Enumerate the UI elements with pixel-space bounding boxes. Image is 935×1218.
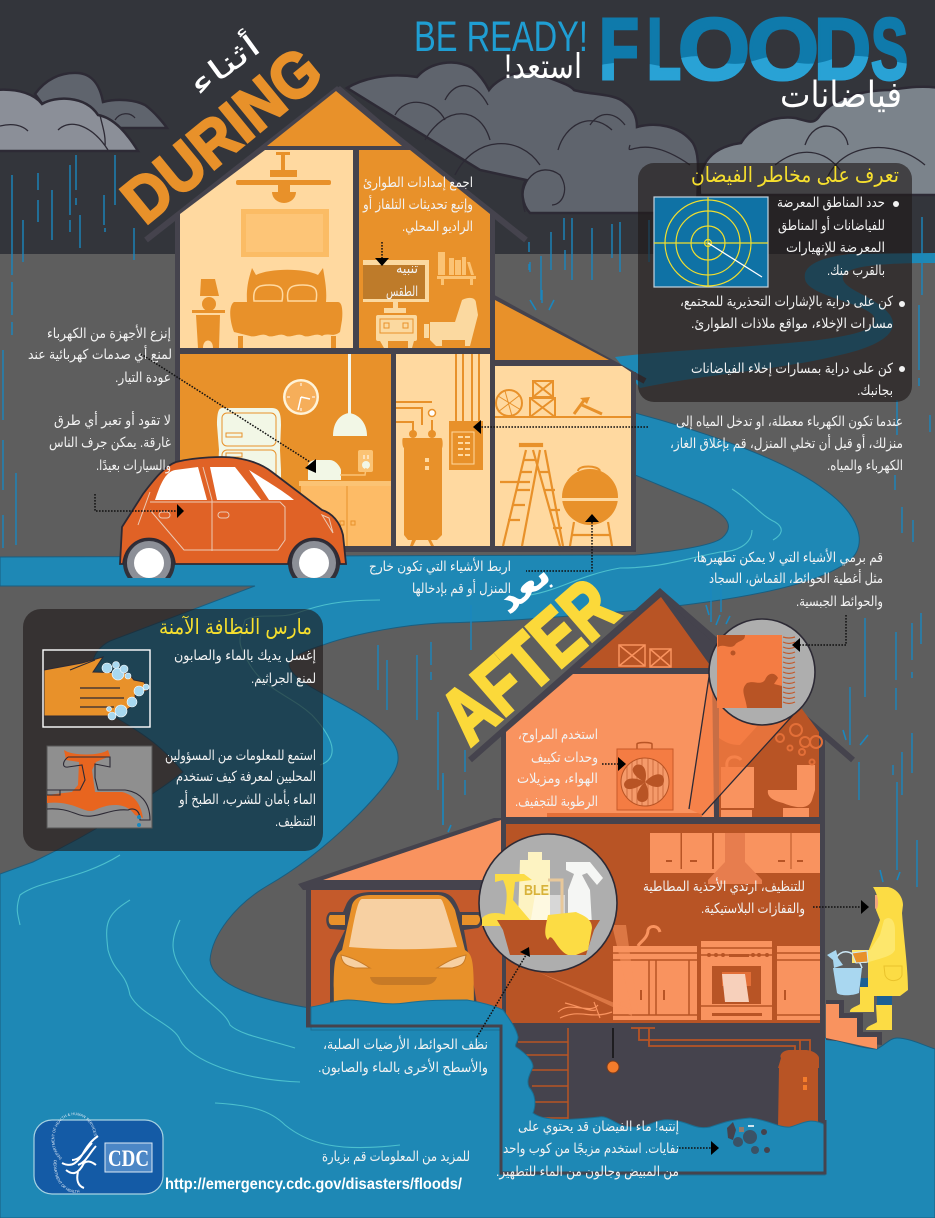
title: floods: F	[599, 1, 639, 98]
room: kitchen after	[506, 824, 820, 1023]
attic	[580, 597, 712, 668]
seal text	[52, 1112, 97, 1193]
counter left	[613, 946, 697, 1020]
text: fans	[515, 726, 598, 810]
heading: during: DURING	[108, 33, 335, 237]
text: emergency supplies	[362, 174, 473, 235]
coat	[868, 887, 908, 996]
walls and roof	[175, 86, 636, 552]
title: floods: O	[678, 1, 750, 98]
text: unplug: لمنع أي صدمات كهربائية عند	[28, 345, 172, 363]
panel heading: مارس النظافة الآمنة	[159, 615, 312, 639]
counter and cabinets	[299, 481, 391, 486]
water use text: التنظيف.	[275, 813, 316, 829]
panel: flood risks	[638, 163, 912, 402]
shelf	[547, 813, 702, 817]
nightstand and lamp	[200, 279, 219, 296]
rain	[3, 155, 930, 887]
arrow: weather alert	[375, 242, 389, 266]
bullet text: كن على دراية بمسارات إخلاء الفياضانات	[691, 360, 893, 377]
text: discard items: قم برمي الأشياء التي لا يمكن تطهيرها،	[693, 548, 883, 566]
cloud: right	[700, 87, 935, 195]
panel heading: تعرف على مخاطر الفيضان	[691, 164, 899, 187]
person in yellow raincoat	[827, 887, 908, 1030]
garage car	[326, 892, 483, 1010]
glove	[852, 951, 868, 963]
debris	[727, 1122, 770, 1154]
bookshelf	[437, 252, 476, 285]
car: during	[120, 457, 346, 589]
text: do not drive: والسيارات بعيدًا.	[96, 457, 171, 474]
cloud: left back	[35, 73, 167, 128]
arrow: car	[95, 494, 184, 518]
right low roof	[495, 300, 609, 360]
text: weather alert	[386, 260, 418, 300]
room: bathroom	[719, 674, 822, 817]
room: fan	[506, 674, 714, 817]
basement heater	[778, 1050, 819, 1128]
zoom circle: cleaning supplies	[479, 834, 617, 972]
river	[0, 413, 935, 1218]
text: boots and gloves: للتنظيف، ارتدي الأحذية المطاطية	[643, 877, 805, 895]
text: do not drive: لا تقود أو تعبر أي طرق	[54, 411, 171, 429]
title: be ready: BE READY!	[414, 13, 588, 61]
title: floods: D	[814, 1, 871, 98]
box fan	[637, 742, 652, 749]
room: bedroom	[180, 150, 353, 348]
garage floor and basement walls	[306, 1026, 825, 1173]
tv	[363, 260, 429, 302]
attic	[267, 91, 402, 146]
arrow: wall	[792, 615, 846, 652]
ceiling fan	[236, 152, 331, 203]
bullet text: بالقرب منك.	[827, 262, 885, 279]
crates	[530, 381, 555, 417]
text: discard items	[693, 548, 883, 610]
arrow: person	[813, 900, 869, 914]
hand wash icon	[43, 650, 150, 727]
arabic: be ready: استعد!	[504, 48, 582, 86]
pendant lamp	[348, 354, 351, 414]
outdoor stairs	[826, 1000, 882, 1049]
clock	[283, 379, 319, 415]
text: fans: الرطوبة للتجفيف.	[515, 793, 598, 810]
mold squiggle	[558, 1002, 612, 1018]
logo: hhs and cdc	[33, 1112, 164, 1195]
bullets	[893, 201, 905, 372]
cloud: left front	[0, 90, 138, 151]
text: weather alert: تنبيه	[396, 260, 418, 276]
electric panel	[449, 421, 483, 470]
url: http://emergency.cdc.gov/disasters/floods/	[165, 1176, 463, 1193]
water use text: المحليين لمعرفة كيف تستخدم	[176, 768, 316, 785]
bullet text	[680, 194, 893, 398]
mold beam	[538, 925, 638, 1016]
text: weather alert: الطقس	[386, 283, 418, 300]
arabic: floods: فياضانات	[780, 74, 902, 115]
text: fans: وحدات تكييف	[531, 749, 598, 766]
water use text: الماء بأمان للشرب، الطبخ أو	[178, 789, 316, 808]
bullet text: مسارات الإخلاء، مواقع ملاذات الطوارئ.	[691, 315, 893, 332]
room: garage	[495, 366, 631, 546]
upper river	[615, 253, 935, 388]
text: emergency supplies: وإتبع تحديثات التلفاز أو	[362, 195, 473, 213]
pipes	[631, 1028, 810, 1058]
console	[376, 315, 417, 341]
text: do not drive: غارقة. يمكن جرف الناس	[49, 434, 171, 451]
text: secure outdoor items: اربط الأشياء التي تكون خارج	[369, 557, 511, 575]
faucet icon	[47, 746, 152, 828]
text: emergency supplies: الراديو المحلي.	[402, 218, 473, 235]
garage after	[298, 818, 506, 1027]
bullet text: المعرضة للإنهيارات	[786, 239, 885, 256]
text: secure outdoor items	[369, 557, 511, 597]
attic crates	[619, 645, 671, 667]
zoom circle: damaged wall	[689, 619, 815, 815]
logo: hhs and cdc: CDC	[108, 1146, 149, 1171]
text: emergency supplies: اجمع إمدادات الطوارئ	[363, 174, 473, 191]
upper cabinets	[650, 833, 820, 873]
hand washing text: إغسل يديك بالماء والصابون	[174, 647, 316, 664]
text: do not drive	[49, 411, 171, 474]
hand washing text: لمنع الجراثيم.	[251, 670, 316, 687]
room: utility	[396, 354, 490, 546]
text: turn off utilities	[670, 413, 903, 474]
panel: safe hygiene	[23, 609, 323, 851]
title: floods: O	[747, 1, 819, 98]
ladder	[500, 444, 563, 546]
toilet	[768, 765, 815, 807]
socket, toaster and cord	[358, 450, 373, 472]
arrow: panel	[473, 420, 648, 434]
text: warning: إنتبه! ماء الفيضان قد يحتوي على	[518, 1118, 679, 1135]
text: clean surfaces	[318, 1035, 488, 1076]
house: during	[146, 86, 645, 552]
stove	[701, 941, 772, 1020]
water: garage and basement	[311, 1000, 825, 1175]
text: secure outdoor items: المنزل أو قم بإدخالها	[412, 579, 511, 597]
cdc mark	[105, 1143, 152, 1172]
wheels	[123, 539, 340, 578]
room: kitchen	[180, 354, 391, 546]
title: floods: S	[871, 1, 908, 98]
title: floods: S	[871, 1, 908, 98]
text: unplug: عودة التيار.	[115, 369, 171, 386]
text: fans: استخدم المراوح،	[518, 726, 598, 743]
ball	[496, 390, 522, 416]
title: floods	[602, 16, 907, 82]
text: discard items: مثل أغطية الحوائط، القماش، السجاد	[709, 569, 883, 587]
text: boots and gloves: والقفازات البلاستيكية.	[701, 900, 805, 917]
title: floods: O	[747, 1, 819, 98]
zoom circle: cleaning supplies: BLE	[524, 882, 549, 899]
seal text: DEPARTMENT OF HEALTH	[54, 1160, 80, 1193]
text: clean surfaces: نظف الحوائط، الأرضيات الصلبة،	[323, 1035, 488, 1053]
bullet text: حدد المناطق المعرضة	[777, 194, 885, 211]
text: boots and gloves	[643, 877, 805, 917]
grill	[578, 466, 600, 471]
water use text	[165, 747, 316, 829]
bucket	[833, 968, 862, 995]
range hood	[708, 833, 762, 884]
eagle	[62, 1136, 98, 1188]
bullet text: كن على دراية بالإشارات التحذيرية للمجتمع،	[680, 293, 893, 310]
text: warning: نفايات. استخدم مزيجًا من كوب واحد	[503, 1140, 679, 1157]
text: turn off utilities: منزلك، أو قبل أن تخلي المنزل، قم بإغلاق الغاز،	[670, 434, 903, 452]
hand washing text	[174, 647, 316, 687]
sink	[721, 767, 754, 808]
basement	[503, 1023, 825, 1133]
hammer	[574, 399, 602, 414]
text: turn off utilities: الكهرباء والمياه.	[827, 457, 903, 474]
text: discard items: والحوائط الجبسية.	[796, 593, 883, 610]
heading: after: AFTER	[423, 562, 633, 760]
boots and pants	[850, 978, 892, 1030]
arrow: unplug	[141, 354, 316, 473]
fridge	[217, 408, 281, 490]
river highlight lines	[17, 489, 781, 1148]
arrow: fan	[602, 757, 626, 771]
text: warning: من المبيض وجالون من الماء للتطهير.	[496, 1163, 679, 1180]
text: unplug: إنزع الأجهزة من الكهرباء	[47, 324, 171, 342]
arabic: after: بعد	[487, 553, 558, 621]
title: floods: L	[647, 1, 681, 98]
armchair	[430, 298, 478, 346]
title: floods: L	[647, 1, 681, 98]
bed	[247, 268, 326, 302]
title: floods: O	[678, 1, 750, 98]
arrow: grill	[526, 514, 599, 571]
picture frame	[241, 209, 329, 257]
arrow: cleaning supplies	[477, 947, 530, 1037]
text: fans: الهواء، ومزيلات	[517, 770, 598, 787]
water use text: استمع للمعلومات من المسؤولين	[165, 747, 316, 764]
bullet text: للفياضانات أو المناطق	[778, 216, 885, 234]
arrow: debris	[679, 1141, 719, 1155]
arabic: during: أثناء	[180, 25, 267, 103]
text: clean surfaces: والأسطح الأخرى بالماء والصابون.	[318, 1058, 488, 1076]
seal text: DEPARTMENT OF HEALTH & HUMAN SERVICES USA	[52, 1112, 97, 1160]
room: living	[359, 150, 490, 348]
rain splashes	[448, 300, 900, 882]
cloud: main dark	[347, 62, 698, 213]
text: unplug	[28, 324, 172, 386]
title: floods: F	[599, 1, 639, 98]
light bulb	[612, 1028, 614, 1058]
title: floods: D	[814, 1, 871, 98]
text: more information: للمزيد من المعلومات قم بزيارة	[322, 1148, 470, 1165]
counter right	[777, 946, 820, 1020]
bullet text: بجانبك.	[857, 382, 893, 398]
text: warning	[496, 1118, 679, 1180]
bubbles	[776, 724, 822, 764]
water heater	[402, 438, 443, 540]
radar icon	[654, 197, 768, 287]
